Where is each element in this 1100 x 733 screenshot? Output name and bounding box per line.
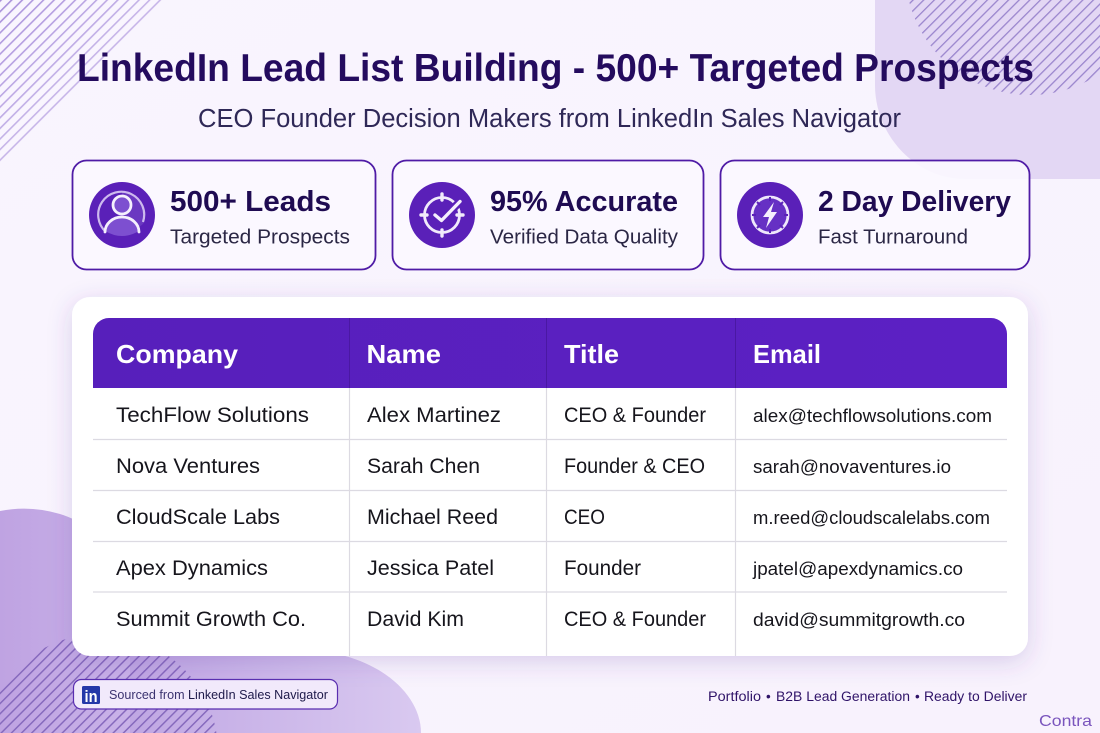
stat label: Targeted Prospects bbox=[170, 226, 350, 248]
table header bbox=[93, 318, 1007, 388]
table row: CloudScale Labs: Michael Reed bbox=[367, 505, 498, 529]
table row: TechFlow Solutions: Alex Martinez bbox=[367, 403, 501, 427]
subtitle: CEO Founder Decision Makers from LinkedIn Sales Navigator bbox=[198, 105, 901, 133]
table row: Summit Growth Co.: david@summitgrowth.co bbox=[753, 609, 965, 630]
icon: target check bbox=[409, 182, 475, 248]
stat value: 500+ Leads bbox=[170, 186, 331, 218]
Contra watermark: Contra bbox=[1039, 713, 1092, 730]
table row: CloudScale Labs: m.reed@cloudscalelabs.com bbox=[753, 507, 990, 528]
badge text: Sourced from LinkedIn Sales Navigator bbox=[109, 688, 328, 702]
table row: Apex Dynamics: Apex Dynamics bbox=[116, 556, 268, 580]
table row: Summit Growth Co.: Summit Growth Co. bbox=[116, 607, 306, 631]
footer tagline bbox=[708, 689, 1028, 704]
footer tagline: • bbox=[915, 689, 920, 704]
table row: TechFlow Solutions: alex@techflowsolutions.com bbox=[753, 405, 992, 426]
table row: Summit Growth Co. bbox=[116, 607, 965, 631]
table row: Nova Ventures bbox=[116, 454, 951, 478]
table row: TechFlow Solutions bbox=[116, 403, 992, 427]
decoration: top-left hatch bbox=[0, 0, 165, 165]
icon: lightning gauge bbox=[737, 182, 803, 248]
icon: LinkedIn: in bbox=[84, 687, 98, 706]
stat label: Verified Data Quality bbox=[490, 226, 679, 248]
table row: TechFlow Solutions: CEO & Founder bbox=[564, 403, 706, 427]
footer tagline: Portfolio bbox=[708, 689, 761, 704]
table header: Title bbox=[564, 339, 619, 369]
title: LinkedIn Lead List Building - 500+ Targeted Prospects bbox=[77, 47, 1034, 90]
source badge bbox=[74, 680, 338, 709]
table row: Summit Growth Co.: CEO & Founder bbox=[564, 607, 706, 631]
icon: person bbox=[89, 182, 155, 248]
table row: CloudScale Labs bbox=[116, 505, 990, 529]
stat card: 2 Day Delivery bbox=[720, 160, 1030, 270]
table row: CloudScale Labs: CEO bbox=[564, 505, 605, 529]
table row: Apex Dynamics: Jessica Patel bbox=[367, 556, 494, 580]
stat value: 95% Accurate bbox=[490, 186, 678, 218]
table header: Company bbox=[116, 339, 239, 369]
table row: Nova Ventures: Sarah Chen bbox=[367, 454, 480, 478]
table row: Summit Growth Co.: David Kim bbox=[367, 607, 464, 631]
table header: Email bbox=[753, 339, 821, 369]
decoration: top-right shape bbox=[875, 0, 1100, 179]
table row: CloudScale Labs: CloudScale Labs bbox=[116, 505, 280, 529]
table row: Apex Dynamics: Founder bbox=[564, 556, 641, 580]
table row: Nova Ventures: Founder & CEO bbox=[564, 454, 705, 478]
stat value: 2 Day Delivery bbox=[818, 186, 1011, 218]
table row: Nova Ventures: sarah@novaventures.io bbox=[753, 456, 951, 477]
stat label: Fast Turnaround bbox=[818, 226, 968, 248]
footer tagline: • bbox=[766, 689, 771, 704]
table row: TechFlow Solutions: TechFlow Solutions bbox=[116, 403, 309, 427]
table row: Apex Dynamics bbox=[116, 556, 963, 580]
panel: lead table bbox=[72, 297, 1028, 656]
stat card: 500+ Leads bbox=[72, 160, 376, 270]
footer tagline: Ready to Deliver bbox=[924, 689, 1028, 704]
stat card: 95% Accurate bbox=[392, 160, 704, 270]
table row: Apex Dynamics: jpatel@apexdynamics.co bbox=[752, 558, 963, 579]
footer tagline: B2B Lead Generation bbox=[776, 689, 910, 704]
table header: Name bbox=[366, 339, 441, 369]
table row: Nova Ventures: Nova Ventures bbox=[116, 454, 260, 478]
decoration: bottom-left shapes bbox=[0, 509, 421, 733]
